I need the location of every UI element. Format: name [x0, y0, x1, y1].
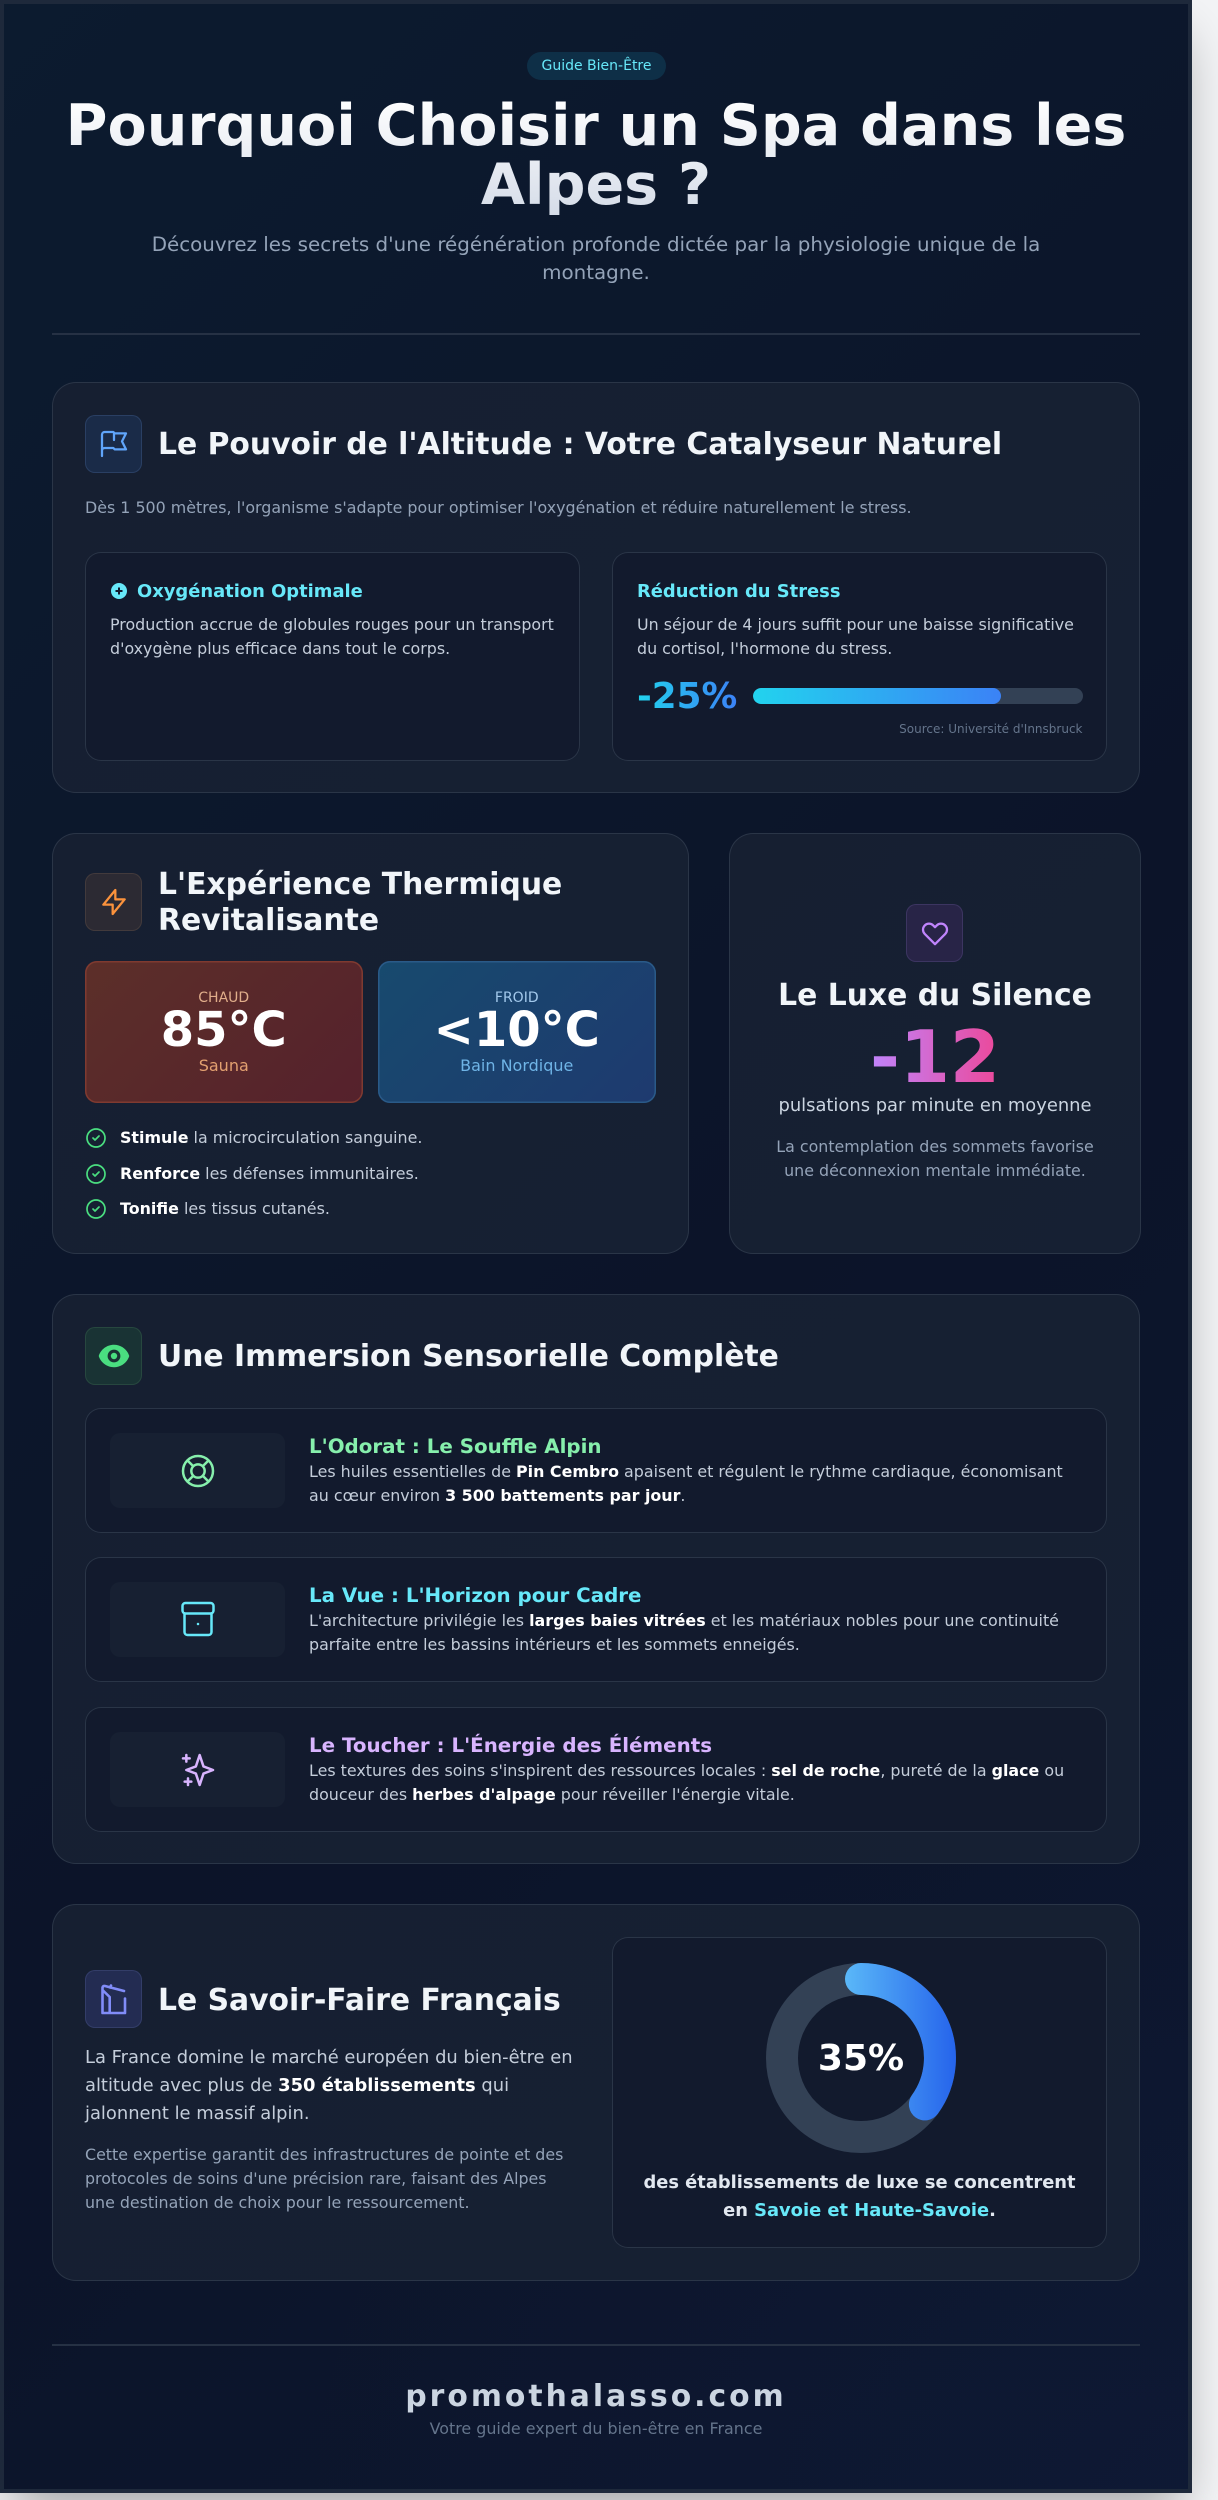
body text	[309, 1611, 1059, 1654]
sub-panel: Oxygénation Optimale	[85, 552, 580, 761]
paragraph	[84, 2047, 573, 2124]
stat: -25%: -25%	[637, 676, 737, 717]
secondary paragraph: protocoles de soins d'une précision rare, faisant des Alpes	[85, 2169, 547, 2188]
body text	[309, 1462, 1063, 1505]
sub-heading: Réduction du Stress	[637, 580, 840, 602]
footer: site name: promothalasso.com	[405, 2379, 787, 2414]
heading: Le Luxe du Silence	[778, 978, 1092, 1013]
icon: sparkles	[110, 1732, 285, 1807]
panel: Une Immersion Sensorielle	[52, 1294, 1140, 1864]
body text: du cortisol, l'hormone du stress.	[637, 638, 892, 658]
subtitle: Découvrez les secrets d'une régénération profonde dictée par la physiologie unique de la	[152, 232, 1040, 256]
secondary paragraph: Cette expertise garantit des infrastructures de pointe et des	[85, 2145, 563, 2164]
donut chart 35%	[766, 1963, 956, 2153]
body text: douceur des herbes d'alpage pour réveiller l'énergie vitale.	[309, 1785, 795, 1804]
body text: Les huiles essentielles de Pin Cembro apaisent et régulent le rythme cardiaque, économisant	[309, 1462, 1063, 1481]
progress fill 75%	[753, 688, 1001, 704]
source: Source: Université d'Innsbruck	[899, 722, 1082, 736]
check icon	[86, 1164, 106, 1184]
temperature: 85°C	[161, 1002, 287, 1058]
icon: plus circle	[111, 583, 127, 599]
panel: Le Savoir-Faire Français	[52, 1904, 1140, 2281]
secondary paragraph	[85, 2145, 563, 2212]
panel: Le Luxe du Silence	[729, 833, 1141, 1254]
icon: building	[85, 1970, 142, 2028]
body text: d'oxygène plus efficace dans tout le corps.	[110, 638, 450, 658]
item: odorat	[85, 1408, 1107, 1533]
body text	[110, 614, 554, 658]
description: une déconnexion mentale immédiate.	[784, 1161, 1086, 1180]
item: vue	[85, 1557, 1107, 1682]
progress bar	[753, 688, 1083, 704]
check icon	[86, 1199, 106, 1219]
donut chart 35%: 35%	[817, 2038, 904, 2078]
badge: Guide Bien-Être: Guide Bien-Être	[542, 58, 652, 74]
body text: Production accrue de globules rouges pour un transport	[110, 614, 554, 634]
card: chaud	[85, 961, 362, 1103]
secondary paragraph: une destination de choix pour le ressourcement.	[85, 2193, 470, 2212]
heading: Le Pouvoir de l'Altitude : Votre Catalyseur Naturel	[158, 426, 1002, 462]
body text	[637, 614, 1074, 658]
description	[776, 1137, 1094, 1180]
caption: en Savoie et Haute-Savoie.	[723, 2200, 996, 2221]
paragraph: altitude avec plus de 350 établissements qui	[85, 2075, 509, 2096]
caption: des établissements de luxe se concentrent	[643, 2172, 1076, 2193]
badge: Guide Bien-Être	[527, 52, 666, 80]
stat label: pulsations par minute en moyenne	[778, 1095, 1092, 1116]
body text: Les textures des soins s'inspirent des ressources locales : sel de roche, pureté de la glace ou	[309, 1761, 1064, 1780]
subtitle: montagne.	[542, 260, 650, 284]
list item: Tonifie les tissus cutanés.	[120, 1199, 330, 1218]
description: La contemplation des sommets favorise	[776, 1137, 1094, 1156]
heading: Revitalisante	[158, 902, 379, 938]
item: toucher	[85, 1707, 1107, 1832]
icon: lifebuoy	[110, 1433, 285, 1508]
sub-heading: L'Odorat : Le Souffle Alpin	[309, 1435, 601, 1458]
title: Pourquoi Choisir un Spa dans les	[66, 92, 1126, 158]
sub-heading: Oxygénation Optimale	[137, 580, 363, 602]
paragraph: La France domine le marché européen du bien-être en	[85, 2047, 573, 2068]
temperature: <10°C	[434, 1002, 600, 1058]
subtitle	[152, 232, 1040, 284]
heading: Une Immersion Sensorielle Complète	[158, 1338, 779, 1374]
heading: L'Expérience Thermique	[158, 866, 562, 902]
body text: parfaite entre les bassins intérieurs et les sommets enneigés.	[309, 1635, 800, 1654]
label: CHAUD	[198, 990, 249, 1006]
sub-panel: Réduction du Stress	[612, 552, 1107, 761]
sub-heading: Le Toucher : L'Énergie des Éléments	[309, 1734, 712, 1757]
intro text: Dès 1 500 mètres, l'organisme s'adapte pour optimiser l'oxygénation et réduire naturellement le stress.	[85, 498, 912, 517]
paragraph: jalonnent le massif alpin.	[85, 2103, 310, 2124]
list item: Renforce les défenses immunitaires.	[120, 1164, 419, 1182]
icon: archive box	[110, 1582, 285, 1657]
stat: -12: -12	[870, 1015, 1000, 1099]
panel: L'Expérience Thermique	[52, 833, 689, 1254]
heading: Le Savoir-Faire Français	[158, 1982, 561, 2018]
card: froid	[378, 961, 656, 1103]
icon: bolt	[85, 873, 142, 931]
body text: Un séjour de 4 jours suffit pour une baisse significative	[637, 614, 1074, 634]
body text: au cœur environ 3 500 battements par jour.	[309, 1486, 685, 1505]
title: Alpes ?	[481, 152, 711, 218]
title	[0, 96, 1192, 214]
footer: tagline: Votre guide expert du bien-être en France	[430, 2419, 762, 2438]
panel: Le Pouvoir de l'Altitude	[52, 382, 1140, 793]
label: FROID	[495, 990, 539, 1006]
name: Sauna	[199, 1056, 249, 1074]
list item: Stimule la microcirculation sanguine.	[120, 1128, 422, 1147]
body text	[309, 1761, 1064, 1804]
check icon	[86, 1128, 106, 1148]
icon: flag	[85, 415, 142, 473]
sub-heading: La Vue : L'Horizon pour Cadre	[309, 1584, 642, 1607]
panel: donut stat	[612, 1937, 1107, 2248]
heading	[158, 866, 562, 938]
icon: eye	[85, 1327, 142, 1385]
caption	[643, 2172, 1076, 2221]
icon: heart	[906, 904, 963, 962]
body text: L'architecture privilégie les larges baies vitrées et les matériaux nobles pour une continuité	[309, 1611, 1059, 1630]
name: Bain Nordique	[460, 1056, 573, 1074]
